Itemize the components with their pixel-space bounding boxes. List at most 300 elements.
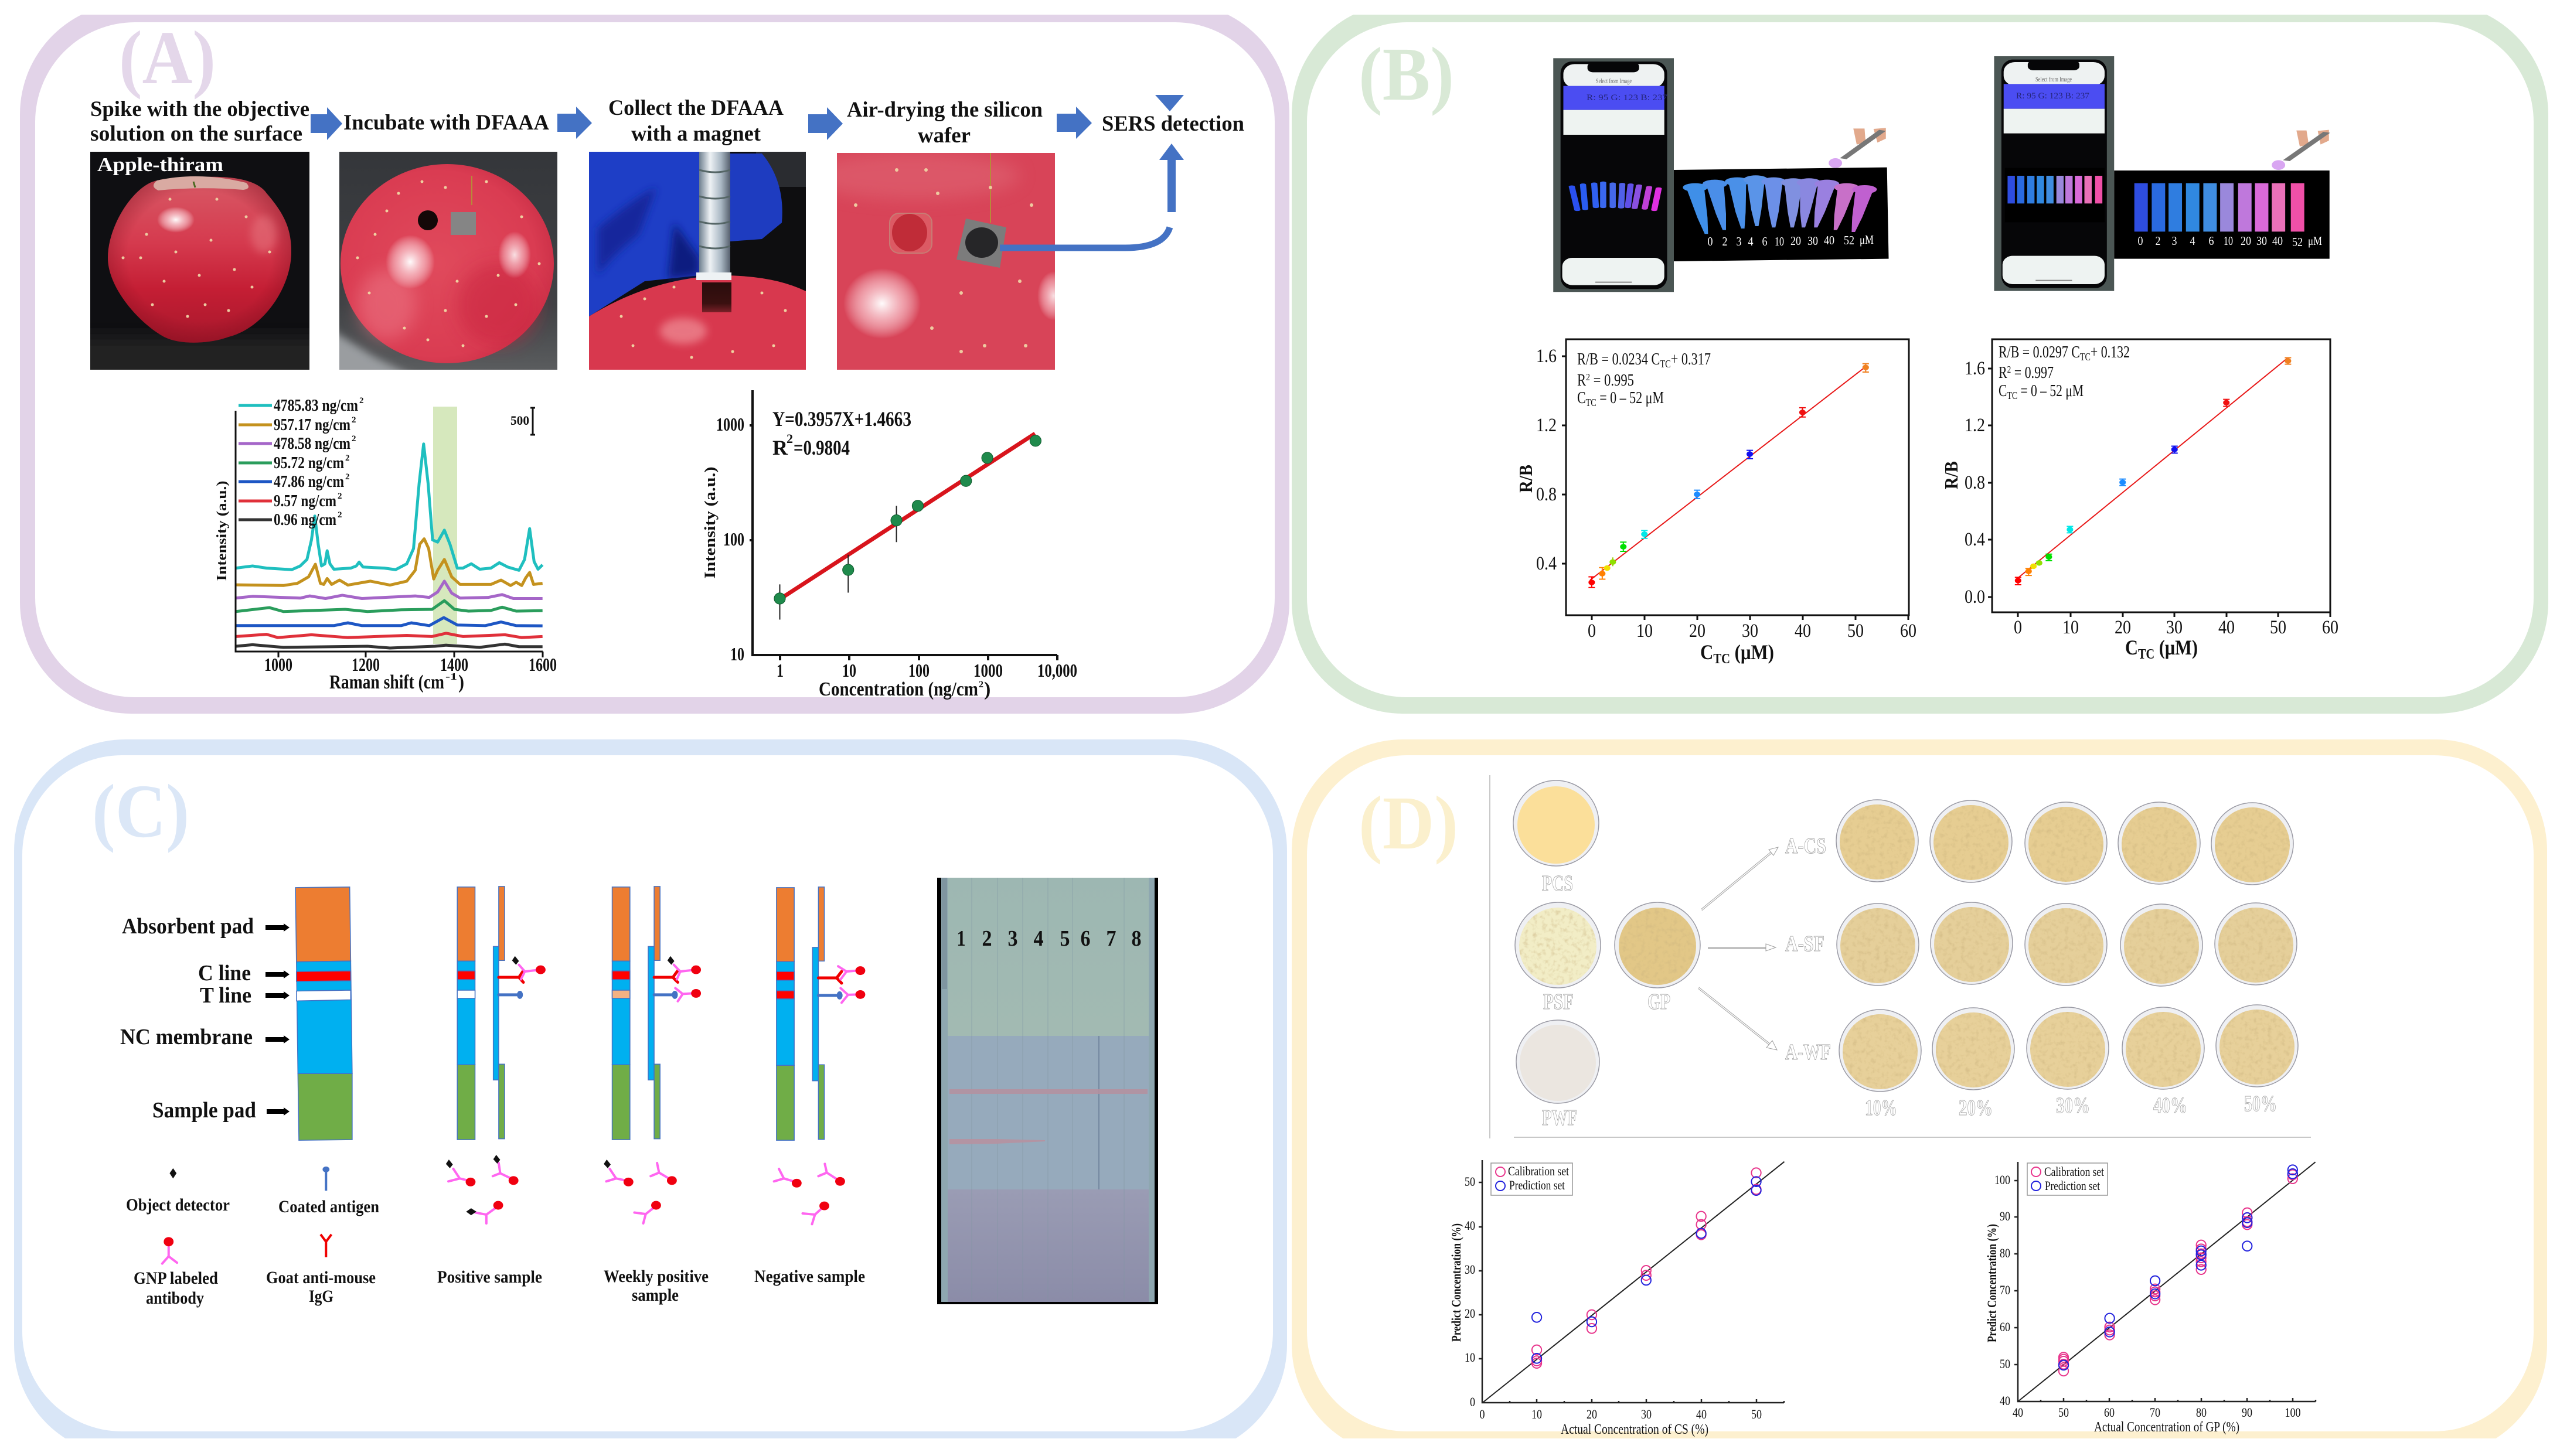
plate labels: 10% — [1865, 1096, 1897, 1120]
equation — [772, 407, 911, 459]
data points with error bars — [774, 435, 1041, 619]
tube concentration labels: 20 — [1790, 234, 1801, 248]
x labels: 50 — [2270, 617, 2286, 638]
plate labels: 50% — [2244, 1092, 2277, 1116]
strips on phone screen — [2005, 168, 2105, 222]
x axis labels: 10 — [842, 660, 856, 681]
chart: GP concentration scatter — [1984, 1162, 2316, 1435]
equation: + 0.132 — [2091, 343, 2130, 362]
icon: dried drop spot — [890, 213, 932, 253]
x title: (μM) — [1730, 640, 1774, 664]
x title: TC — [2138, 647, 2154, 662]
y labels: 0.8 — [1965, 472, 1985, 493]
tube concentration labels: 4 — [1748, 234, 1754, 248]
legend: Prediction set — [1509, 1178, 1565, 1192]
plate: GP — [1615, 902, 1700, 988]
tube concentration labels: 52 — [1844, 233, 1854, 247]
positive strip front — [457, 887, 475, 1140]
y labels: 0.4 — [1965, 529, 1985, 550]
tick labels: 30 — [1641, 1407, 1652, 1421]
tick labels: 40 — [1696, 1407, 1707, 1421]
equation: R — [1999, 364, 2010, 382]
label arrows — [265, 923, 290, 1116]
chart: R/B calibration, tubes — [1515, 339, 1916, 667]
equation: TC — [1586, 397, 1596, 408]
x axis title: -1 — [445, 671, 457, 682]
x title: C — [1700, 640, 1715, 664]
x axis labels: 1200 — [352, 654, 380, 675]
strip concentration labels: 4 — [2190, 234, 2195, 248]
chart: SERS spectra — [215, 396, 557, 693]
plate labels: PSF — [1543, 990, 1574, 1014]
plate labels: A-CS — [1785, 834, 1826, 858]
plate labels: 20% — [1959, 1096, 1993, 1120]
legend captions — [126, 1195, 379, 1308]
tick labels: 80 — [2000, 1246, 2010, 1260]
tick labels: 100 — [1994, 1172, 2010, 1187]
sample captions: sample — [632, 1285, 679, 1305]
panel A border — [0, 0, 1289, 714]
x labels — [1588, 620, 1916, 642]
spectra axes — [236, 411, 543, 657]
x labels: 0 — [2014, 617, 2022, 638]
x axis title: Actual Concentration of CS (%) — [1561, 1422, 1708, 1437]
y labels — [1965, 358, 1985, 608]
strip concentration labels: 52 — [2292, 235, 2303, 249]
strip concentration labels: 20 — [2241, 234, 2251, 248]
raw material plates — [1513, 780, 1700, 1103]
diagonal and points — [1482, 1162, 1784, 1403]
frame and ticks — [1562, 339, 1909, 620]
tube concentration labels: 2 — [1722, 234, 1728, 248]
photo: incubate with DFAAA — [328, 152, 557, 381]
legend: 47.86 ng/cm — [274, 472, 344, 491]
arrow: step 4 to 5 — [1057, 107, 1092, 139]
phone 2 readout text: Select from Image — [2035, 75, 2072, 83]
UV torch in hand — [1829, 128, 1886, 168]
tick labels: 90 — [2242, 1405, 2252, 1420]
equation: =0.9804 — [794, 436, 850, 459]
tube concentration labels: 3 — [1736, 234, 1742, 248]
fit and points — [1588, 364, 1869, 588]
step caption: air drying — [847, 98, 1043, 148]
panel A heading: (A) — [119, 16, 216, 100]
equation: 2 — [2007, 364, 2011, 375]
legend: 2 — [352, 434, 356, 444]
sample row A-SF — [1837, 902, 2297, 986]
legend: 4785.83 ng/cm — [274, 396, 358, 415]
x labels: 40 — [2218, 617, 2235, 638]
plate labels: PCS — [1542, 871, 1573, 896]
weak positive strip side — [648, 886, 660, 1139]
y axis labels: 1000 — [716, 414, 744, 435]
icon: magnet rod — [696, 151, 731, 280]
photo: collect with magnet — [589, 151, 806, 370]
lane numbers: 2 — [982, 926, 992, 951]
equation: = 0.997 — [2011, 364, 2054, 382]
tick labels: 20 — [1465, 1306, 1475, 1321]
plate: PWF — [1516, 1020, 1599, 1103]
y labels: 0.0 — [1965, 587, 1985, 608]
x axis title: Raman shift (cm — [329, 671, 444, 693]
legend: 478.58 ng/cm — [274, 434, 350, 453]
photo: apple thiram — [90, 152, 309, 370]
x labels: 20 — [1689, 620, 1705, 642]
equation: = 0 – 52 μM — [2017, 382, 2084, 400]
icon: DFAAA droplet — [418, 210, 438, 230]
equation: R/B = 0.0297 C — [1999, 343, 2103, 362]
panel C: lateral flow immunoassay — [0, 739, 1289, 1456]
x labels: 30 — [1742, 620, 1758, 642]
x labels: 0 — [1588, 620, 1596, 642]
step caption: collect — [608, 96, 784, 146]
strip part labels — [120, 914, 256, 1123]
lane numbers: 6 — [1081, 926, 1090, 951]
x axis labels: 100 — [908, 660, 930, 681]
y labels: 1.2 — [1536, 415, 1557, 436]
plate labels: A-WF — [1785, 1040, 1831, 1065]
panel B heading: (B) — [1359, 32, 1454, 117]
panel D border — [1289, 739, 2560, 1456]
legend: 0.96 ng/cm — [274, 510, 336, 529]
step caption: SERS detection: SERS detection — [1102, 112, 1244, 136]
target analyte diamonds — [169, 956, 675, 1215]
arrow: step 1 to 2 — [311, 107, 342, 140]
y title: R/B — [1941, 461, 1962, 489]
y axis title: Predict Concentration (%) — [1449, 1223, 1463, 1342]
photo: air-dried silicon wafer — [809, 152, 1070, 370]
y labels: 0.4 — [1536, 553, 1557, 574]
step caption: collect: with a magnet — [631, 122, 761, 146]
x axis title: Concentration (ng/cm — [819, 678, 978, 700]
tick labels: 50 — [1465, 1174, 1475, 1189]
panel B: smartphone tetracycline detection — [1289, 0, 2560, 714]
phone with strip image — [1994, 56, 2330, 291]
arrow: step 3 to 4 — [808, 107, 843, 140]
x labels: 20 — [2115, 617, 2131, 638]
fit line — [779, 434, 1035, 599]
panel D: powder adulteration detection — [1289, 739, 2560, 1456]
tick labels: 90 — [2000, 1209, 2010, 1223]
equation — [1999, 343, 2130, 401]
fluorescent tubes — [1683, 175, 1877, 234]
y axis title: Predict Concentration (%) — [1984, 1224, 1999, 1342]
photo background — [937, 878, 1158, 1304]
lane numbers — [956, 926, 1142, 951]
legend — [1491, 1163, 1572, 1195]
legend: Prediction set — [2045, 1178, 2100, 1193]
chart: R/B calibration, strips — [1941, 339, 2338, 662]
phone 1 readout text — [1587, 77, 1668, 103]
x labels: 60 — [2322, 617, 2338, 638]
legend captions: Goat anti-mouse — [266, 1268, 376, 1287]
legend: 957.17 ng/cm — [274, 415, 350, 434]
tick labels: 0 — [1479, 1407, 1485, 1421]
panel A: apple thiram SERS detection — [0, 0, 1289, 714]
equation: TC — [1660, 358, 1671, 370]
x axis labels: 1000 — [973, 660, 1003, 681]
step caption: spike: Spike with the objective — [90, 97, 309, 121]
diagonal and points — [2018, 1162, 2316, 1402]
tick labels: 40 — [2013, 1405, 2023, 1420]
x axis labels: 1000 — [264, 654, 292, 675]
sample captions: Positive sample — [437, 1267, 542, 1287]
x axis labels: 10,000 — [1037, 660, 1077, 681]
equation: + 0.317 — [1671, 350, 1711, 369]
tick labels: 50 — [2000, 1356, 2010, 1371]
step caption: collect: Collect the DFAAA — [608, 96, 784, 120]
lane numbers: 5 — [1060, 926, 1070, 951]
black strip card — [2114, 171, 2330, 259]
tube concentration labels: 30 — [1807, 234, 1818, 248]
main strip — [295, 887, 352, 1140]
x labels: 50 — [1847, 620, 1864, 642]
axes and ticks — [2014, 1162, 2316, 1402]
test strip photograph — [937, 878, 1158, 1304]
lane numbers: 4 — [1034, 926, 1043, 951]
strip concentration labels: 2 — [2156, 234, 2160, 248]
plate labels: A-SF — [1785, 932, 1824, 956]
weak positive strip front — [612, 887, 630, 1140]
arrow: curved connector from wafer — [1000, 227, 1170, 248]
black photo card — [1674, 168, 1889, 261]
frame and ticks — [1988, 339, 2330, 617]
equation: R/B = 0.0234 C — [1577, 350, 1681, 369]
plate: PSF — [1515, 902, 1601, 988]
plate labels: 40% — [2153, 1093, 2187, 1118]
plate labels — [1542, 834, 2277, 1130]
lane numbers: 8 — [1131, 926, 1142, 951]
x labels: 60 — [1900, 620, 1916, 642]
legend: Calibration set — [1508, 1164, 1569, 1178]
icon: silicon wafer — [451, 212, 476, 235]
x labels: 10 — [1636, 620, 1653, 642]
free antibodies — [162, 1163, 837, 1264]
legend: 2 — [338, 492, 342, 501]
x axis labels — [264, 654, 557, 675]
strip concentration labels: 0 — [2138, 234, 2143, 248]
equation: TC — [2080, 351, 2091, 363]
y axis labels: 100 — [723, 528, 744, 550]
phone 2 readout text — [2016, 75, 2089, 101]
strip part labels: Sample pad — [152, 1098, 256, 1123]
x axis labels: 1400 — [440, 654, 468, 675]
coated antigen tips — [517, 991, 843, 1000]
legend: 9.57 ng/cm — [274, 492, 336, 510]
equation: C — [1999, 382, 2010, 400]
tube concentration labels: μM — [1860, 233, 1874, 247]
tick labels: 40 — [1465, 1218, 1475, 1233]
strip part labels: Absorbent pad — [122, 914, 254, 939]
step caption: air drying: wafer — [918, 124, 971, 148]
tick labels: 60 — [2104, 1405, 2115, 1420]
x axis title: ) — [984, 678, 990, 700]
strip concentration labels: 3 — [2172, 234, 2177, 248]
lane numbers: 3 — [1008, 926, 1017, 951]
phone body — [1994, 56, 2114, 291]
y labels: 1.2 — [1965, 415, 1985, 436]
panel C heading: (C) — [92, 769, 189, 854]
panel B border — [1289, 0, 2560, 714]
tube concentration labels: 10 — [1775, 234, 1784, 248]
arrows to sample rows — [1698, 847, 1778, 1050]
y labels: 0.8 — [1536, 484, 1557, 505]
tick labels: 30 — [1465, 1262, 1475, 1277]
legend icon: goat anti-mouse IgG — [321, 1235, 332, 1257]
strip part labels: T line — [200, 983, 251, 1008]
highlight band — [433, 407, 457, 644]
sample captions: Negative sample — [754, 1267, 865, 1286]
strip concentration labels: 6 — [2208, 234, 2214, 248]
tick labels — [1465, 1174, 1762, 1421]
y axis labels — [716, 414, 744, 664]
photo label: Apple-thiram: Apple-thiram — [97, 154, 223, 176]
lane separators — [972, 878, 1124, 1302]
panel C border — [0, 739, 1289, 1456]
axes — [750, 390, 1057, 660]
sample row A-CS — [1836, 800, 2293, 885]
tick labels: 60 — [2000, 1319, 2010, 1334]
plate: PCS — [1513, 780, 1599, 866]
scale bar 500: 500 — [510, 413, 529, 428]
chart: log calibration curve — [702, 390, 1077, 700]
legend: 2 — [352, 415, 356, 425]
equation: 2 — [787, 431, 793, 446]
legend captions: IgG — [309, 1287, 333, 1306]
equation: R — [1577, 371, 1588, 390]
scale bar 500 — [510, 408, 535, 435]
strip concentration labels: 40 — [2272, 234, 2283, 248]
equation: C — [1577, 389, 1588, 407]
x labels: 30 — [2166, 617, 2183, 638]
sample row A-WF — [1839, 1005, 2298, 1092]
strip part labels: C line — [198, 961, 251, 986]
step caption: air drying: Air-drying the silicon — [847, 98, 1043, 122]
darker lane cut — [1098, 1036, 1099, 1189]
sample photo frame — [1490, 775, 2311, 1138]
y axis title: Intensity (a.u.) — [702, 466, 719, 579]
fit and points — [2015, 357, 2291, 585]
legend: 2 — [345, 472, 349, 482]
strip concentration labels — [2138, 234, 2322, 249]
strip concentration labels: μM — [2308, 234, 2322, 248]
phone with tube image — [1553, 58, 1889, 292]
tick labels: 70 — [2000, 1283, 2010, 1297]
equation: = 0.995 — [1590, 371, 1634, 390]
equation: 2 — [1586, 371, 1590, 383]
phone 1 readout text: Select from Image — [1596, 77, 1632, 85]
legend: 2 — [345, 453, 349, 463]
tube concentration labels: 0 — [1708, 234, 1713, 248]
legend: Calibration set — [2044, 1164, 2104, 1179]
equation: Y=0.3957X+1.4663 — [772, 407, 911, 431]
axes and ticks — [1479, 1160, 1784, 1403]
y axis labels: 10 — [730, 643, 744, 664]
phone body — [1553, 58, 1674, 292]
legend: 95.72 ng/cm — [274, 453, 344, 472]
step caption: spike: solution on the surface — [90, 122, 302, 146]
capture reagents — [499, 971, 842, 995]
tube concentration labels: 40 — [1824, 233, 1834, 247]
x labels: 10 — [2062, 617, 2079, 638]
UV torch in hand — [2272, 130, 2330, 170]
step caption: spike — [90, 97, 309, 146]
panel D heading: (D) — [1359, 781, 1458, 865]
legend — [2027, 1163, 2108, 1195]
x title: (μM) — [2154, 636, 2198, 659]
legend: 2 — [338, 510, 342, 520]
positive strip side — [493, 886, 505, 1139]
spectra lines — [236, 444, 543, 648]
tube concentration labels — [1708, 233, 1874, 248]
legend — [239, 396, 363, 529]
legend captions: antibody — [146, 1288, 204, 1308]
x title: TC — [1713, 652, 1730, 667]
tube concentration labels: 6 — [1762, 234, 1768, 248]
strip concentration labels: 30 — [2256, 234, 2267, 248]
tick labels: 10 — [1465, 1350, 1475, 1365]
tick labels: 40 — [2000, 1393, 2010, 1408]
legend icon: coated antigen — [322, 1167, 329, 1191]
tick labels: 70 — [2150, 1405, 2160, 1420]
plate labels: GP — [1647, 990, 1670, 1014]
x axis labels: 1600 — [529, 654, 557, 675]
step caption: incubate: Incubate with DFAAA — [343, 111, 549, 135]
test line — [949, 1139, 1045, 1144]
tick labels: 0 — [1470, 1394, 1475, 1409]
chart: CS concentration scatter — [1449, 1160, 1784, 1437]
tick labels — [1994, 1172, 2301, 1420]
x title: C — [2125, 636, 2140, 659]
bound antibodies — [519, 965, 856, 1003]
tick labels: 50 — [1751, 1407, 1762, 1421]
equation — [1577, 350, 1711, 408]
strip concentration labels: 10 — [2224, 234, 2233, 248]
gold nanoparticles — [164, 966, 865, 1246]
y labels: 1.6 — [1965, 358, 1985, 379]
y labels — [1536, 346, 1557, 574]
tubes on phone screen — [1572, 183, 1659, 210]
equation: R — [772, 436, 788, 459]
phone 1 readout text: R: 95 G: 123 B: 237 — [1587, 93, 1668, 103]
y labels: 1.6 — [1536, 346, 1557, 367]
tick labels: 100 — [2285, 1405, 2301, 1420]
control line — [949, 1089, 1148, 1094]
arrow: up to SERS detection — [1159, 144, 1184, 212]
strip part labels: NC membrane — [120, 1025, 253, 1049]
x axis title: ) — [458, 671, 464, 693]
lane numbers: 1 — [956, 926, 966, 951]
legend captions: Object detector — [126, 1195, 230, 1215]
y axis title: Intensity (a.u.) — [215, 480, 230, 581]
legend captions: Coated antigen — [278, 1197, 379, 1216]
arrow: step 2 to 3 — [557, 107, 592, 139]
icon: down triangle — [1155, 95, 1184, 111]
equation: = 0 – 52 μM — [1596, 389, 1664, 407]
phone 2 readout text: R: 95 G: 123 B: 237 — [2016, 91, 2089, 101]
fluorescent strips — [2135, 183, 2304, 231]
x axis title: Actual Concentration of GP (%) — [2094, 1420, 2239, 1435]
equation: TC — [2007, 390, 2017, 401]
x labels: 40 — [1795, 620, 1811, 642]
plate labels: 30% — [2056, 1093, 2090, 1118]
lane numbers: 7 — [1107, 926, 1116, 951]
strip diagrams — [162, 886, 865, 1264]
plate labels: PWF — [1542, 1106, 1577, 1130]
tick labels: 50 — [2058, 1405, 2069, 1420]
icon: wafer with dark deposit — [956, 219, 1006, 268]
legend: 2 — [359, 396, 363, 405]
